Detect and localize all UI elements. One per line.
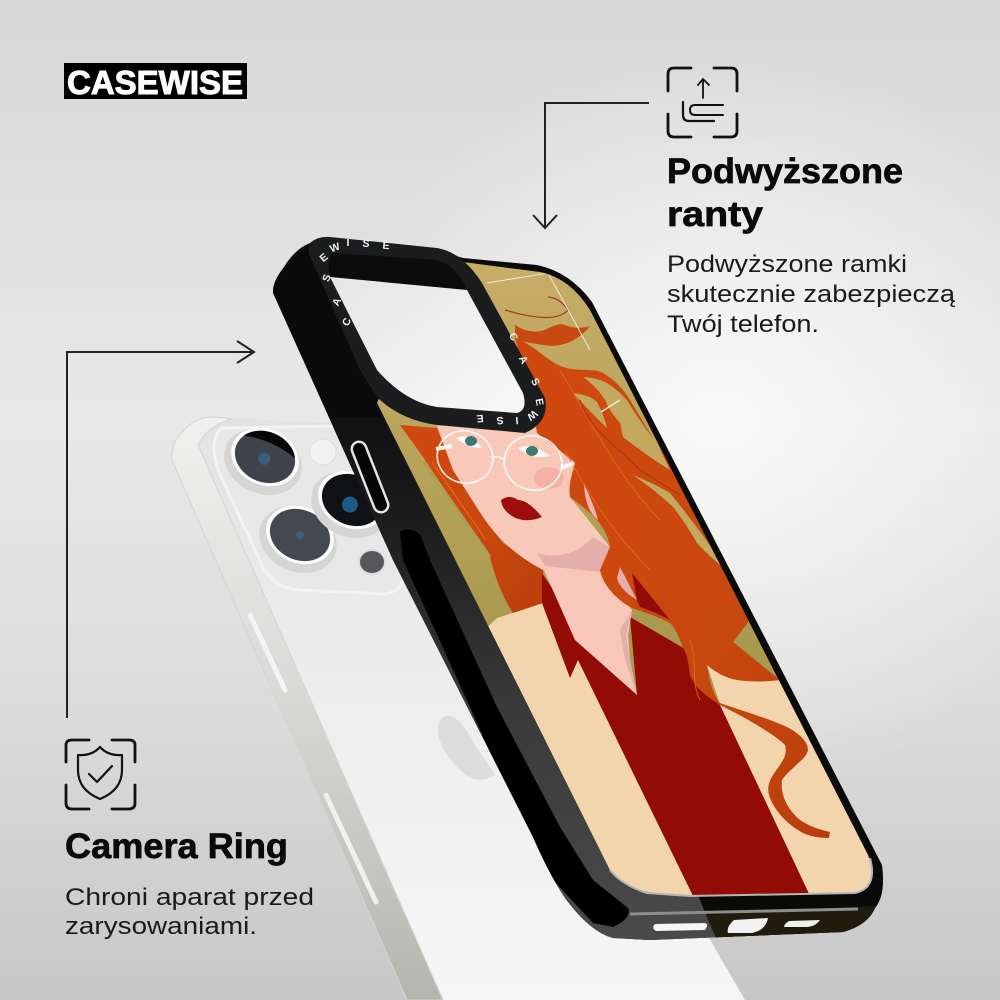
text: raised edges: [667, 251, 956, 338]
ring text: A: [516, 354, 530, 367]
ring text: E: [382, 240, 390, 252]
lens top: [213, 415, 313, 507]
eye left: [456, 436, 482, 448]
silver line: [630, 909, 858, 914]
lens bottom: [248, 493, 348, 585]
text: raised edges: Podwyższone ramki: [667, 251, 907, 278]
text: camera ring: Chroni aparat przed: [65, 884, 314, 911]
artwork: [377, 262, 872, 895]
heading: camera ring: Camera Ring: [65, 827, 288, 866]
camera opening dark lip: [329, 253, 468, 290]
black case: [273, 237, 890, 945]
eye right: [518, 446, 550, 457]
arrow to raised edges: [533, 103, 649, 228]
lens right: [300, 458, 400, 550]
ring text: I: [347, 237, 350, 249]
ring text: E: [317, 251, 331, 265]
ring text: E: [476, 412, 484, 424]
lips: [501, 497, 542, 520]
ring text: A: [330, 296, 344, 308]
ring text: S: [320, 273, 334, 283]
heading: raised edges: [667, 152, 903, 234]
bezel rim: [610, 858, 872, 896]
arrow to camera ring: [67, 341, 254, 718]
ring text: E: [532, 398, 546, 406]
heading: raised edges: ranty: [667, 195, 764, 234]
case body: [273, 241, 883, 940]
logo: CASEWISE: [67, 64, 243, 101]
ring text: W: [524, 407, 540, 423]
case details clipped: [330, 417, 890, 945]
ring text: S: [362, 238, 370, 250]
text: camera ring: [65, 884, 314, 940]
side button lower: [326, 795, 376, 902]
left hair: [400, 425, 543, 613]
red wedge: [632, 573, 670, 620]
right hair: [515, 338, 830, 838]
shirt: [542, 573, 812, 900]
skin wisp: [584, 484, 598, 520]
text: raised edges: Twój telefon.: [667, 311, 819, 338]
camera opening: [330, 277, 525, 413]
icon: shield: [66, 740, 135, 809]
text: camera ring: zarysowaniami.: [65, 913, 257, 940]
side button: [359, 449, 381, 505]
ring text: S: [528, 376, 542, 388]
blush: [534, 467, 564, 489]
ring text: I: [515, 414, 519, 426]
face: [437, 415, 610, 570]
port holes: [653, 923, 707, 931]
glasses: [436, 430, 575, 492]
bottom right band: [698, 890, 882, 938]
camera plateau: [214, 426, 404, 594]
ring text: C: [506, 331, 520, 344]
heading: raised edges: Podwyższone: [667, 152, 903, 191]
ring text: S: [496, 414, 504, 426]
hair gaps: [573, 377, 721, 566]
jacket: [470, 603, 885, 900]
ring text: W: [328, 241, 342, 255]
jaw shadow: [537, 537, 610, 572]
phone frame edge: [172, 417, 443, 1000]
ring text: C: [340, 316, 354, 328]
white lines: [487, 273, 590, 350]
flash: [310, 439, 336, 465]
camera ring: [309, 237, 546, 433]
lower reflection: [330, 417, 720, 945]
text: raised edges: skutecznie zabezpieczą: [667, 281, 956, 308]
slot: [400, 529, 629, 927]
apple logo: [438, 716, 495, 779]
top hair strand: [515, 324, 590, 346]
hair strands: [560, 370, 700, 700]
neck: [543, 568, 637, 695]
ring text: [317, 237, 546, 426]
pink loop: [617, 567, 637, 600]
side button upper: [250, 615, 285, 690]
icon: raised edges: [668, 68, 737, 137]
sensor: [359, 550, 385, 574]
silver phone: [172, 415, 745, 1000]
